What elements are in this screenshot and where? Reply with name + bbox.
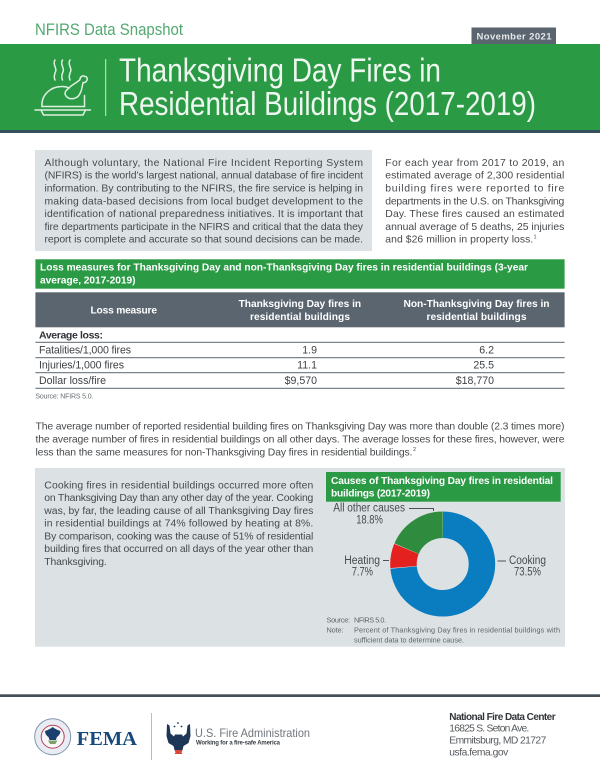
divider [105,59,106,116]
date tag: November 2021 [476,32,552,42]
contact address: 16825 S. Seton Ave. [449,724,529,735]
table heading: Loss measures for Thanksgiving Day and non-Thanksgiving Day fires in residential buildings (3-year [40,263,528,274]
panel: NFIRS description: information. By contributing to the NFIRS, the fire service is helping in [44,184,363,195]
chart source and note: NFIRS 5.0. [354,616,386,625]
title text [119,52,536,123]
chart source and note: sufficient data to determine cause. [354,636,464,645]
icon: DHS seal [35,719,71,755]
text block: annual estimates: departments in the U.S. on Thanksgiving [385,196,565,207]
text block: comparison: 2 [413,447,416,453]
contact address: usfa.fema.gov [449,748,509,759]
footer rule [0,694,600,697]
text block: annual estimates: annual average of 5 deaths, 25 injuries [385,222,564,233]
text block: cooking fires: Thanksgiving. [44,557,107,568]
chart source and note: Percent of Thanksgiving Day fires in residential buildings with [354,626,560,635]
text block: cooking fires: building fires that occurred on all days of the year other than [44,544,314,555]
icon: steaming turkey [35,60,90,115]
table rows: 6.2 [479,344,494,356]
text block: comparison: less than the same measures for non-Thanksgiving Day fires in residential buildings. [36,447,412,458]
logo: FEMA [35,719,138,755]
table rows: Fatalities/1,000 fires [39,344,131,356]
label: all other causes: All other causes [333,503,405,515]
chart source and note: Note: [326,626,344,635]
chart heading: buildings (2017-2019) [331,489,430,500]
table header row: residential buildings [250,312,350,323]
table rows: 11.1 [297,360,317,372]
table header row: Thanksgiving Day fires in [239,299,361,310]
panel: NFIRS description: making data-based decisions from local budget development to the [44,196,363,207]
table rows: Average loss: [39,329,103,341]
logo divider [151,713,152,760]
text block: comparison: The average number of reported residential building fires on Thanksgiving Day was more than double (2.3 times more) [36,421,564,432]
title banner [0,44,600,133]
table header row: Non-Thanksgiving Day fires in [404,299,550,310]
label: cooking: Cooking [509,555,546,567]
text block: annual estimates: For each year from 2017 to 2019, an [385,158,565,169]
table rows: Dollar loss/fire [39,375,106,387]
publication label: NFIRS Data Snapshot [35,20,183,39]
panel: NFIRS description: Although voluntary, the National Fire Incident Reporting System [44,158,363,169]
contact address [449,712,556,759]
text block: annual estimates: 1 [534,234,537,240]
panel: NFIRS description: identification of national preparedness initiatives. It is important that [44,209,363,220]
donut chart [403,525,482,603]
panel: NFIRS description: fire departments participate in the NFIRS and critical that the data they [44,222,364,233]
table: loss measures [35,292,565,389]
date tag [472,28,556,44]
table rows: 25.5 [473,360,494,372]
chart source and note: Source: [326,616,350,625]
logo: FEMA: FEMA [77,728,138,750]
table heading: average, 2017-2019) [40,276,136,287]
text block: annual estimates [385,158,565,246]
chart heading: Causes of Thanksgiving Day fires in residential [331,476,553,487]
label: heating [344,555,389,579]
text block: annual estimates: and $26 million in property loss. [385,235,533,246]
text block: comparison: the average number of fires in residential buildings on all other days. The average losses for these fires, however, were [36,435,565,446]
text block: annual estimates: Day. These fires caused an estimated [385,209,565,220]
text block: comparison [36,421,565,458]
table header row [35,292,565,327]
text block: cooking fires: on Thanksgiving Day than any other day of the year. Cooking [44,493,314,504]
table header row: residential buildings [426,312,527,323]
chart heading [326,472,561,502]
table rows: $9,570 [285,375,317,387]
title text: Thanksgiving Day Fires in [119,52,441,90]
label: cooking: 73.5% [514,567,541,579]
label: heating: Heating [344,555,380,567]
panel: NFIRS description [35,150,372,251]
label: cooking [498,555,546,579]
text block: cooking fires: By comparison, cooking was the cause of 51% of residential [44,532,313,542]
table rows [35,329,565,389]
panel: NFIRS description: (NFIRS) is the world’s largest national, annual database of fire incident [44,171,363,182]
icon: eagle [166,722,190,754]
text block: cooking fires: Cooking fires in residential buildings occurred more often [44,480,314,491]
label: all other causes: 18.8% [356,515,383,527]
text block: annual estimates: building fires were reported to fire [385,184,565,195]
table header row: Loss measure [90,306,157,317]
table source: Source: NFIRS 5.0. [35,394,93,401]
table rows: $18,770 [456,375,494,387]
text block: cooking fires [43,480,314,568]
table rows: Injuries/1,000 fires [39,360,124,372]
panel: causes [35,468,565,647]
text block: cooking fires: was, by far, the leading cause of all Thanksgiving Day fires [43,506,313,517]
text block: annual estimates: estimated average of 2,300 residential [385,171,564,182]
logo: U.S. Fire Administration: U.S. Fire Administration [195,726,310,740]
chart source and note [326,616,560,645]
logo: U.S. Fire Administration: Working for a fire-safe America [196,740,281,746]
logo: U.S. Fire Administration [166,722,310,754]
text block: cooking fires: in residential buildings at 74% followed by heating at 8%. [44,519,313,530]
panel: NFIRS description: report is complete and accurate so that sound decisions can be made. [44,235,363,246]
label: all other causes [333,503,434,527]
table heading [35,259,565,289]
contact address: Emmitsburg, MD 21727 [449,736,547,747]
contact address: National Fire Data Center [449,712,556,723]
label: heating: 7.7% [352,567,373,579]
table rows: 1.9 [302,344,317,356]
